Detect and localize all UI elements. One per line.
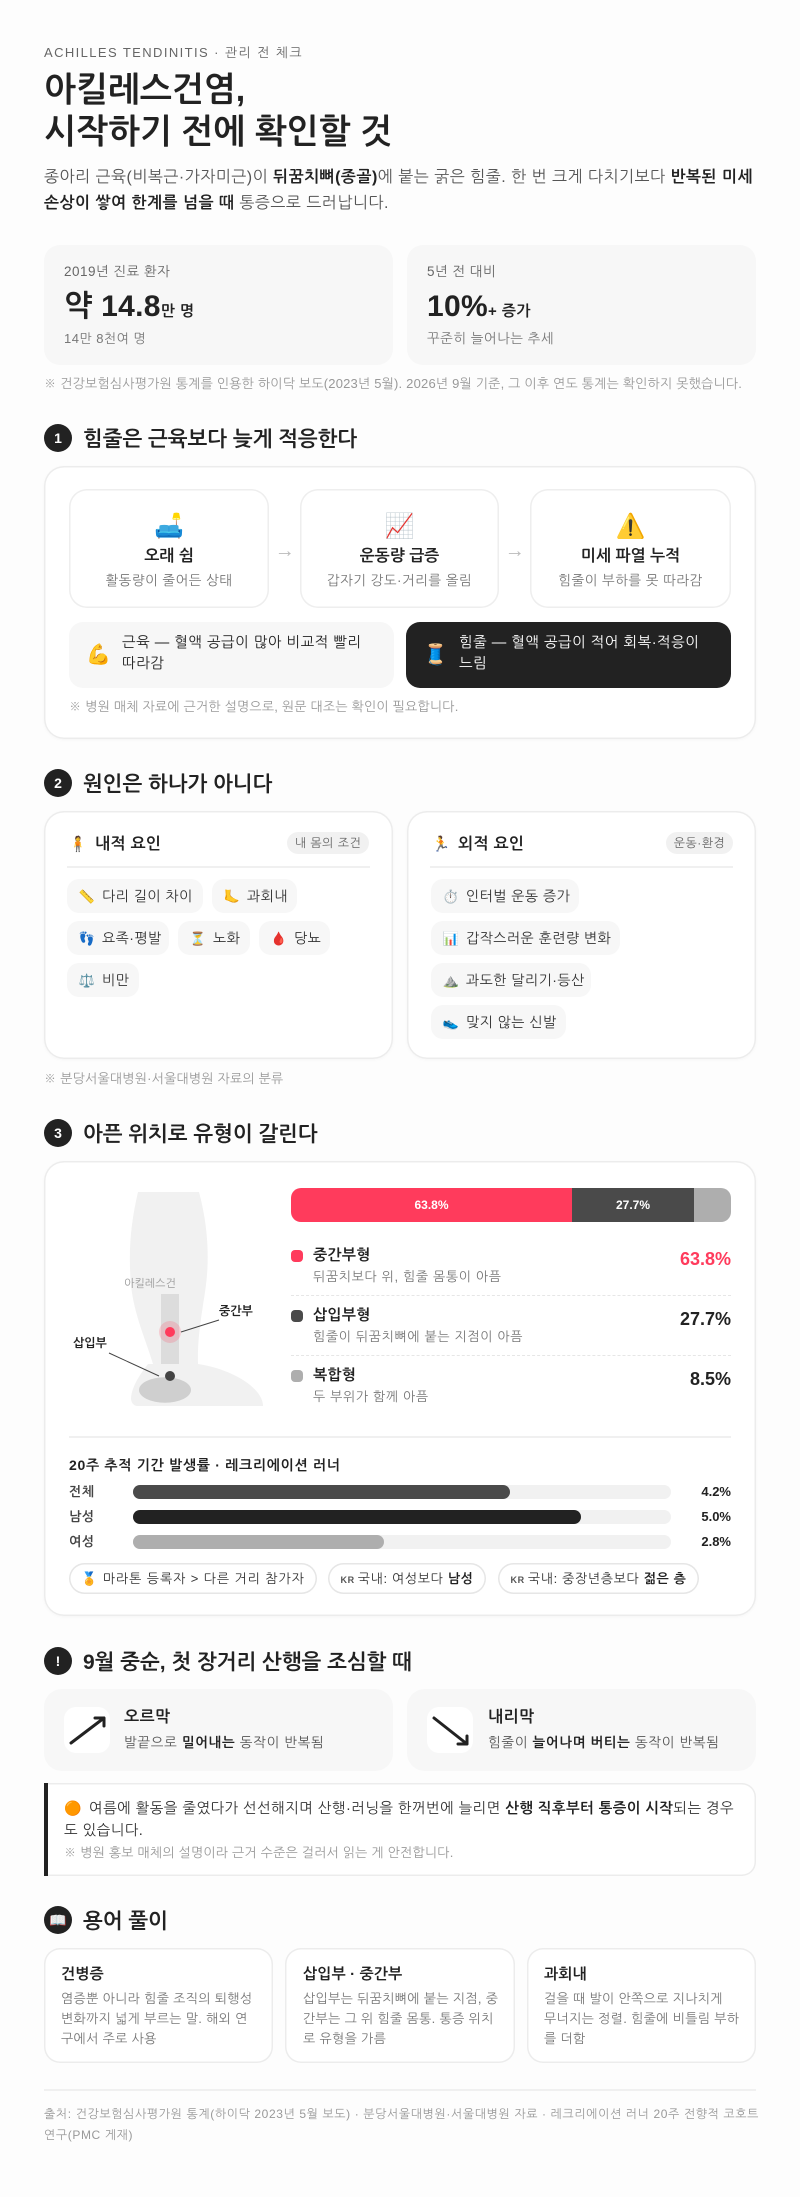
glossary card: 로 유형을 가름 (303, 2031, 386, 2046)
comparison: muscle: 따라감 (122, 656, 164, 672)
legend: mixed: 두 부위가 함께 아픔 (313, 1389, 429, 1404)
flow step: micro tears (530, 489, 731, 608)
callout text: 도 있습니다. (64, 1823, 143, 1839)
flow step: micro tears: 미세 파열 누적 (581, 548, 680, 565)
lede text (44, 168, 753, 212)
flow step: load surge: 📈 (385, 513, 414, 540)
panel: tendon adaptation (44, 466, 756, 739)
chip: 비만 (102, 972, 129, 988)
chip: 과회내 (247, 888, 288, 904)
legend: insertional: 삽입부형 (313, 1307, 371, 1324)
glossary card: 건병증 (61, 1966, 104, 1983)
flow step: micro tears: ⚠️ (616, 513, 645, 540)
chip: 📏 (79, 889, 95, 904)
chip (431, 963, 591, 997)
comparison: tendon: 힘줄 — 혈액 공급이 적어 회복·적응이 (459, 635, 699, 651)
stat card: growth (407, 245, 756, 365)
section heading: glossary (44, 1906, 168, 1934)
stacked bar: 63.8% (414, 1198, 449, 1212)
chip: 인터벌 운동 증가 (466, 888, 570, 904)
stat label: 5년 전 대비 (427, 264, 496, 279)
glossary card (285, 1948, 515, 2063)
callout text: 여름에 활동을 줄였다가 선선해지며 산행·러닝을 한꺼번에 늘리면 산행 직후부터 통증이 시작되는 경우 (89, 1801, 734, 1817)
pill: KR국내: 여성보다 남성 (340, 1571, 474, 1586)
panel: intrinsic factors (44, 811, 393, 1059)
chip: ⏱️ (443, 889, 459, 904)
chip: 갑작스러운 훈련량 변화 (466, 930, 611, 946)
glossary card (44, 1948, 273, 2063)
pill (328, 1563, 486, 1594)
stat sub: 꾸준히 늘어나는 추세 (427, 331, 554, 346)
callout (44, 1783, 756, 1876)
section heading: glossary: 📖 (49, 1912, 67, 1928)
chip: 📊 (443, 931, 459, 946)
section heading 3: 3 (54, 1125, 62, 1141)
diagram: achilles leg: 삽입부 (73, 1336, 108, 1350)
lede text: 손상이 쌓여 한계를 넘을 때 통증으로 드러납니다. (44, 195, 389, 212)
bar: male: 남성 (69, 1509, 94, 1524)
chip: ⛰️ (443, 973, 459, 988)
arrow: → (275, 540, 295, 562)
lede text: 종아리 근육(비복근·가자미근)이 뒤꿈치뼈(종골)에 붙는 굵은 힘줄. 한 번 크게 다치기보다 반복된 미세 (44, 169, 753, 186)
legend: mixed: 복합형 (313, 1367, 356, 1384)
bar: female (69, 1534, 731, 1549)
panel heading: 외적 요인 (458, 836, 524, 852)
glossary card: 구에서 주로 사용 (61, 2031, 157, 2046)
glossary card: 걸을 때 발이 안쪽으로 지나치게 (544, 1991, 723, 2006)
panel: types by location (44, 1161, 756, 1616)
title (44, 71, 392, 151)
card: downhill (407, 1689, 756, 1771)
tag (287, 832, 369, 854)
chip: 👣 (79, 931, 95, 946)
chip: 다리 길이 차이 (102, 888, 193, 904)
stat sub: 14만 8천여 명 (64, 331, 146, 346)
glossary card (527, 1948, 756, 2063)
glossary card: 과회내 (544, 1966, 587, 1983)
callout text (64, 1800, 734, 1839)
chip: ⚖️ (79, 973, 95, 988)
comparison: muscle: 💪 (86, 644, 112, 666)
glossary card: 변화까지 넓게 부르는 말. 해외 연 (61, 2011, 248, 2026)
chip: 과도한 달리기·등산 (466, 972, 585, 988)
panel heading: 🏃 (432, 836, 450, 852)
section heading 1: 1 (54, 430, 62, 446)
chip: 당뇨 (294, 930, 321, 946)
legend: midportion: 중간부형 (313, 1247, 371, 1264)
footer sources (44, 2107, 759, 2142)
legend: mixed: 8.5% (690, 1369, 731, 1389)
chip: 🦶 (224, 889, 240, 904)
bar: female: 2.8% (701, 1534, 731, 1549)
stacked bar (291, 1188, 731, 1222)
flow step: long rest: 🛋️ (154, 513, 184, 540)
chip: 👟 (443, 1015, 459, 1030)
stat value: 10%+ 증가 (427, 290, 531, 323)
comparison: muscle (69, 622, 394, 688)
legend: insertional: 27.7% (680, 1309, 731, 1329)
chip (178, 921, 250, 955)
stacked bar: 27.7% (616, 1198, 650, 1212)
icon: up arrow (64, 1707, 110, 1753)
bar: all: 4.2% (701, 1484, 731, 1499)
tag (666, 832, 733, 854)
section heading 3: 아픈 위치로 유형이 갈린다 (83, 1122, 318, 1146)
stat card: patients (44, 245, 393, 365)
chip: 🩸 (271, 931, 287, 946)
footer sources: 출처: 건강보험심사평가원 통계(하이닥 2023년 5월 보도) · 분당서울대병원·서울대병원 자료 · 레크리에이션 러너 20주 전향적 코호트 (44, 2107, 759, 2121)
legend: midportion (291, 1245, 731, 1296)
legend: insertional (291, 1305, 731, 1356)
flow step: load surge (300, 489, 499, 608)
section heading 2 (44, 769, 272, 797)
legend: mixed (291, 1367, 731, 1404)
flow step: long rest: 오래 쉼 (144, 548, 194, 565)
flow step: long rest: 활동량이 줄어든 상태 (106, 573, 232, 588)
flow step: micro tears: 힘줄이 부하를 못 따라감 (558, 573, 703, 588)
icon: down arrow (427, 1707, 473, 1753)
stat value: 약 14.8만 명 (64, 290, 194, 323)
arrow: → (505, 540, 525, 562)
flow step: load surge: 운동량 급증 (360, 548, 439, 565)
flow step: load surge: 갑자기 강도·거리를 올림 (327, 573, 472, 588)
callout note: ※ 병원 홍보 매체의 설명이라 근거 수준은 걸러서 읽는 게 안전합니다. (64, 1845, 454, 1860)
chip (259, 921, 330, 955)
pill (498, 1563, 699, 1594)
section heading: caution: ! (56, 1653, 60, 1669)
chip (431, 1005, 566, 1039)
card sub: 힘줄이 늘어나며 버티는 동작이 반복됨 (488, 1735, 720, 1750)
glossary card: 를 더함 (544, 2031, 586, 2046)
card: uphill (44, 1689, 393, 1771)
flow step: long rest (69, 489, 269, 608)
chip (431, 879, 579, 913)
pill: KR국내: 중장년층보다 젊은 층 (511, 1571, 686, 1586)
chip: 노화 (213, 930, 240, 946)
comparison: muscle: 근육 — 혈액 공급이 많아 비교적 빨리 (122, 635, 362, 651)
glossary card: 염증뿐 아니라 힘줄 조직의 퇴행성 (61, 1991, 252, 2006)
section heading: glossary: 용어 풀이 (83, 1910, 168, 1932)
tag: 운동·환경 (674, 836, 725, 850)
glossary card: 간부는 그 위 힘줄 몸통. 통증 위치 (303, 2011, 494, 2026)
title: 시작하기 전에 확인할 것 (44, 113, 392, 151)
source note: ※ 분당서울대병원·서울대병원 자료의 분류 (44, 1071, 283, 1086)
footer sources: 연구(PMC 게재) (44, 2128, 133, 2142)
bar: female: 여성 (69, 1534, 94, 1549)
chip: 맞지 않는 신발 (466, 1014, 557, 1030)
stat label: 2019년 진료 환자 (64, 264, 170, 279)
chip (67, 879, 203, 913)
eyebrow: ACHILLES TENDINITIS · 관리 전 체크 (44, 45, 303, 60)
section heading: caution: 9월 중순, 첫 장거리 산행을 조심할 때 (83, 1650, 412, 1674)
comparison: tendon (406, 622, 731, 688)
chip (67, 921, 169, 955)
pill: 🏅 마라톤 등록자 > 다른 거리 참가자 (81, 1571, 305, 1586)
legend: midportion: 63.8% (680, 1249, 731, 1269)
legend: midportion: 뒤꿈치보다 위, 힘줄 몸통이 아픔 (313, 1269, 502, 1284)
bar chart title: 20주 추적 기간 발생률 · 레크리에이션 러너 (69, 1457, 341, 1473)
card text: 오르막 (124, 1709, 171, 1726)
chip (431, 921, 620, 955)
chip (212, 879, 297, 913)
callout text: 🟠 (64, 1800, 81, 1816)
section heading 2: 2 (54, 775, 62, 791)
glossary card: 무너지는 정렬. 힘줄에 비틀림 부하 (544, 2011, 739, 2026)
bar: all (69, 1484, 731, 1499)
title: 아킬레스건염, (44, 71, 245, 109)
comparison: tendon: 느림 (459, 656, 487, 672)
legend: insertional: 힘줄이 뒤꿈치뼈에 붙는 지점이 아픔 (313, 1329, 523, 1344)
tag: 내 몸의 조건 (295, 836, 361, 850)
panel: extrinsic factors (407, 811, 756, 1059)
chip: 요족·평발 (102, 930, 162, 946)
section heading 2: 원인은 하나가 아니다 (83, 772, 272, 796)
source note: ※ 건강보험심사평가원 통계를 인용한 하이닥 보도(2023년 5월). 2026년 9월 기준, 그 이후 연도 통계는 확인하지 못했습니다. (44, 376, 742, 391)
chip: ⏳ (190, 931, 206, 946)
diagram: achilles leg: 중간부 (219, 1304, 254, 1318)
glossary card: 삽입부는 뒤꿈치뼈에 붙는 지점, 중 (303, 1991, 498, 2006)
chip (67, 963, 139, 997)
panel heading: 내적 요인 (95, 836, 161, 852)
bar: male (69, 1509, 731, 1524)
panel heading: 🧍 (68, 836, 88, 852)
section heading 1: 힘줄은 근육보다 늦게 적응한다 (83, 428, 357, 450)
comparison: tendon: 🧵 (423, 644, 449, 666)
diagram: achilles leg: 아킬레스건 (124, 1277, 176, 1290)
panel note: ※ 병원 매체 자료에 근거한 설명으로, 원문 대조는 확인이 필요합니다. (69, 699, 458, 714)
card sub: 발끝으로 밀어내는 동작이 반복됨 (124, 1735, 324, 1750)
diagram: achilles leg (73, 1192, 263, 1406)
bar: all: 전체 (69, 1484, 94, 1499)
card text: 내리막 (488, 1709, 535, 1726)
pill (69, 1563, 317, 1594)
bar: male: 5.0% (701, 1509, 731, 1524)
glossary card: 삽입부 · 중간부 (303, 1966, 402, 1983)
